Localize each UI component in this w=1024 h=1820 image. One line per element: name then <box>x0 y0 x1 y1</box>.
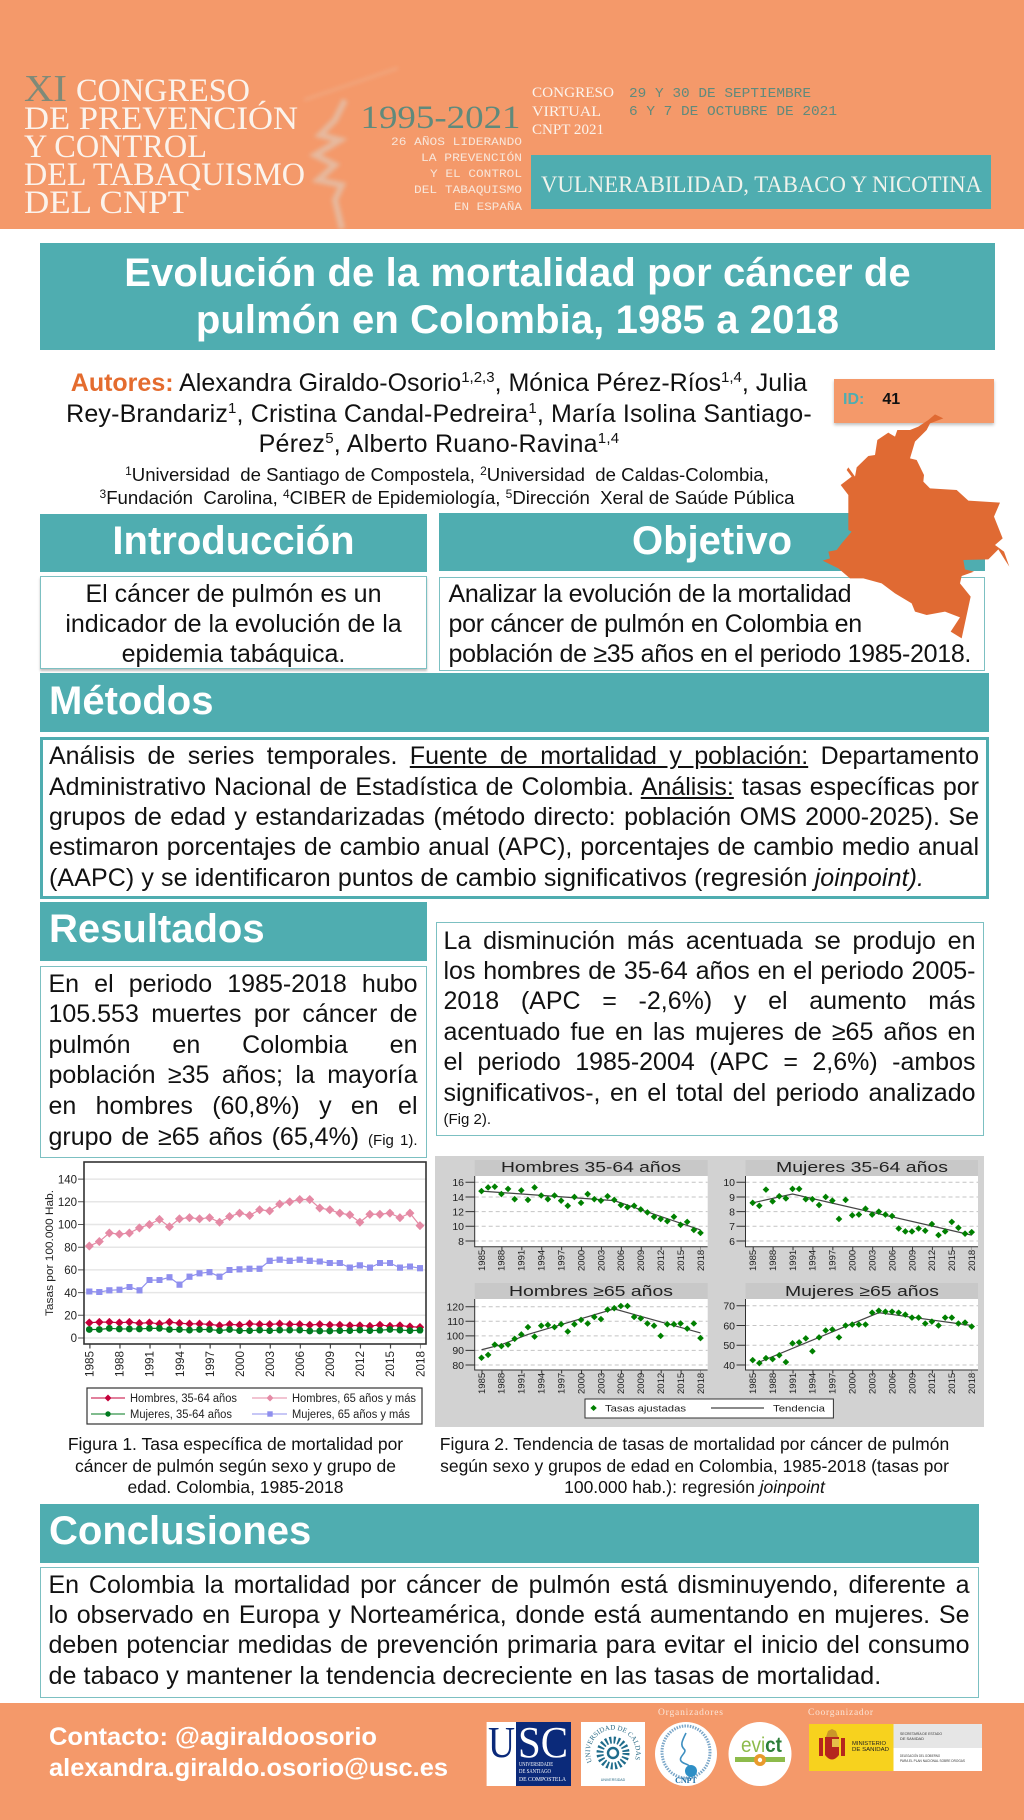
legend: Hombres, 35-64 años <box>130 1393 237 1405</box>
logo: Ministerio de Sanidad <box>809 1724 982 1771</box>
authors: Pérez5, Alberto Ruano-Ravina1,4 <box>259 430 619 458</box>
x axis: 1988 <box>114 1351 127 1377</box>
y axis and grid: 140 <box>58 1174 77 1186</box>
x axis: 2012 <box>354 1351 367 1377</box>
series: mujeres 65 y más <box>89 1260 420 1292</box>
anniversary tagline: EN ESPAÑA <box>454 201 522 214</box>
panel: mujeres 65+: 2006 <box>887 1373 898 1394</box>
x axis: 1997 <box>204 1351 217 1377</box>
panel: mujeres 65+: 2003 <box>868 1373 878 1394</box>
logo: Ministerio de Sanidad: PARA EL PLAN NACIONAL SOBRE DROGAS <box>900 1759 966 1763</box>
logo: Ministerio de Sanidad: MINISTERIO <box>852 1741 886 1747</box>
results text left: 105.553 muertes por cáncer de <box>48 1000 418 1028</box>
panel: mujeres 65+: 2015 <box>947 1373 958 1394</box>
panel: hombres 65+: 80 <box>452 1360 464 1372</box>
results text left <box>40 966 427 1158</box>
virtual congress label: CONGRESO <box>532 85 614 101</box>
objective text: población de ≥35 años en el periodo 1985-2018. <box>448 640 971 668</box>
figure 2 caption: 100.000 hab.): regresión joinpoint <box>564 1477 825 1497</box>
panel: mujeres 35-64: 1994 <box>808 1250 819 1271</box>
affiliations: 3Fundación Carolina, 4CIBER de Epidemiología, 5Dirección Xeral de Saúde Pública <box>100 487 794 508</box>
theme banner <box>531 155 991 209</box>
footer <box>0 1703 1024 1820</box>
logo: EVICT: evict <box>741 1734 782 1757</box>
panel: mujeres 65+: 70 <box>723 1300 735 1312</box>
y axis and grid: 40 <box>64 1288 77 1300</box>
conclusions text: lo observado en Europa y Norteamérica, donde está aumentando en mujeres. Se <box>48 1601 970 1629</box>
congress dates: 29 Y 30 DE SEPTIEMBRE <box>629 87 811 102</box>
panel: hombres 65+: 2018 <box>696 1373 707 1394</box>
results text left: En el periodo 1985-2018 hubo <box>48 970 418 998</box>
objective text: por cáncer de pulmón en Colombia en <box>448 610 862 638</box>
figure 2 caption: según sexo y grupos de edad en Colombia, 1985-2018 (tasas por <box>440 1456 949 1476</box>
panel: mujeres 65+: 1994 <box>808 1373 819 1394</box>
results text right: La disminución más acentuada se produjo en <box>444 927 976 955</box>
authors: Autores: Alexandra Giraldo-Osorio1,2,3, Mónica Pérez-Ríos1,4, Julia <box>71 369 807 397</box>
congress dates: 6 Y 7 DE OCTUBRE DE 2021 <box>629 105 837 120</box>
panel: mujeres 35-64: 10 <box>723 1177 735 1189</box>
panel: mujeres 65+: 50 <box>723 1340 735 1352</box>
organisers label: Organizadores <box>658 1708 723 1718</box>
methods text <box>40 737 989 899</box>
figure 2 caption <box>440 1434 949 1497</box>
congress title: DEL CNPT <box>24 185 189 221</box>
contact: Contacto: @agiraldoosorio <box>49 1723 377 1751</box>
panel: hombres 65+: 1994 <box>536 1373 547 1394</box>
legend: Mujeres, 35-64 años <box>130 1409 232 1421</box>
panel: hombres 65+: 1988 <box>497 1373 508 1394</box>
panel: hombres 35-64: 2015 <box>676 1250 687 1271</box>
conclusions heading <box>40 1504 979 1563</box>
header banner <box>0 0 1024 229</box>
affiliations <box>100 464 794 508</box>
panel: hombres 65+: 1997 <box>556 1373 567 1394</box>
panel: hombres 65+: 2012 <box>656 1373 667 1394</box>
logo: USC: U <box>488 1718 515 1767</box>
figure 1 line chart <box>44 1161 427 1425</box>
logo: Ministerio de Sanidad: DE SANIDAD <box>852 1747 889 1753</box>
panel: hombres 65+ <box>446 1283 708 1394</box>
y axis and grid: 20 <box>64 1310 77 1322</box>
panel: mujeres 35-64: 1988 <box>768 1250 779 1271</box>
logo: Ministerio de Sanidad: DELEGACIÓN DEL GOBIERNO <box>900 1753 940 1758</box>
theme banner: VULNERABILIDAD, TABACO Y NICOTINA <box>541 172 982 197</box>
panel: hombres 35-64: 2009 <box>636 1250 647 1271</box>
ID badge <box>834 379 994 423</box>
anniversary years: 1995-2021 <box>360 100 520 136</box>
x axis <box>84 1346 427 1377</box>
conclusions heading: Conclusiones <box>49 1509 311 1553</box>
results heading: Resultados <box>49 907 265 951</box>
figure 2 legend: Tendencia <box>773 1404 826 1414</box>
panel: hombres 65+: 120 <box>446 1302 464 1314</box>
contact <box>49 1723 448 1782</box>
panel: mujeres 35-64: 1997 <box>828 1250 839 1271</box>
methods text: Análisis de series temporales. Fuente de mortalidad y población: Departamento <box>49 742 979 770</box>
figure 1 caption: Figura 1. Tasa específica de mortalidad por <box>68 1434 403 1454</box>
x axis: 2006 <box>294 1351 307 1377</box>
y axis and grid: 60 <box>64 1265 77 1277</box>
congress title: Y CONTROL <box>24 129 207 165</box>
logo: Universidad de Caldas: UNIVERSIDAD DE CALDAS <box>585 1725 641 1764</box>
panel: mujeres 35-64: Mujeres 35-64 años <box>776 1160 948 1176</box>
legend: Hombres, 65 años y más <box>292 1393 416 1405</box>
panel: hombres 35-64: 2012 <box>656 1250 667 1271</box>
legend <box>87 1388 422 1424</box>
x axis: 2018 <box>414 1351 427 1377</box>
panel: hombres 35-64 <box>452 1160 708 1271</box>
co-organiser label: Coorganizador <box>808 1708 874 1718</box>
results text right: significativos-, en el total del periodo analizado <box>444 1079 976 1107</box>
anniversary tagline: DEL TABAQUISMO <box>414 185 522 197</box>
methods text: grupos de edad y estandarizadas (método directo: población OMS 2000-2025). Se <box>49 803 979 831</box>
logo: USC: SC <box>518 1718 568 1767</box>
panel: hombres 35-64: 14 <box>452 1192 464 1204</box>
panel: mujeres 35-64: 2018 <box>967 1250 978 1271</box>
virtual congress label: VIRTUAL <box>532 104 601 120</box>
figure 2 legend <box>585 1399 833 1418</box>
results text right: 2018 (APC = -2,6%) y el aumento más <box>444 987 976 1015</box>
panel: mujeres 65+ <box>723 1283 978 1394</box>
methods text: Administrativo Nacional de Estadística de Colombia. Análisis: tasas específicas por <box>49 773 979 801</box>
series: mujeres 35-64 <box>89 1328 420 1331</box>
panel: hombres 65+: 1985 <box>477 1373 488 1394</box>
panel: mujeres 35-64: 2000 <box>848 1250 858 1271</box>
y axis and grid: Tasas por 100.000 Hab. <box>44 1190 56 1316</box>
title <box>40 243 995 350</box>
y axis and grid: 80 <box>64 1242 77 1254</box>
panel: mujeres 35-64: 2015 <box>947 1250 958 1271</box>
panel: mujeres 65+: Mujeres ≥65 años <box>785 1284 939 1300</box>
logo: USC <box>487 1718 571 1786</box>
panel: hombres 35-64: 1985 <box>477 1250 488 1271</box>
logo: USC: DE COMPOSTELA <box>519 1777 567 1783</box>
panel: mujeres 35-64: 1991 <box>788 1250 799 1271</box>
x axis: 1991 <box>144 1351 157 1377</box>
panel: mujeres 35-64: 2012 <box>927 1250 938 1271</box>
panel: mujeres 35-64 <box>723 1160 978 1271</box>
conclusions text: En Colombia la mortalidad por cáncer de pulmón está disminuyendo, diferente a <box>48 1571 970 1599</box>
authors <box>66 369 812 458</box>
panel: hombres 35-64: 2018 <box>696 1250 707 1271</box>
results text left: población ≥35 años; la mayoría <box>48 1061 418 1089</box>
panel: mujeres 35-64: 2003 <box>868 1250 878 1271</box>
objective heading: Objetivo <box>632 519 792 563</box>
panel: mujeres 65+: 1997 <box>828 1373 839 1394</box>
methods heading <box>40 673 989 732</box>
panel: hombres 35-64: 1997 <box>556 1250 567 1271</box>
y axis and grid: 100 <box>58 1220 77 1232</box>
results heading <box>40 902 427 961</box>
panel: hombres 65+: 110 <box>447 1316 464 1328</box>
x axis: 2003 <box>264 1351 277 1377</box>
panel: mujeres 35-64: 1985 <box>748 1250 759 1271</box>
panel: hombres 35-64: 8 <box>458 1236 464 1248</box>
panel: hombres 35-64: 2003 <box>596 1250 607 1271</box>
results text right: (Fig 2). <box>444 1111 491 1128</box>
figure 1 caption <box>68 1434 403 1497</box>
anniversary tagline: Y EL CONTROL <box>430 169 522 181</box>
congress title: DE PREVENCIÓN <box>24 99 298 137</box>
panel: mujeres 35-64: 9 <box>729 1192 735 1204</box>
panel: mujeres 65+: 40 <box>723 1360 735 1372</box>
panel: mujeres 65+: 60 <box>723 1320 735 1332</box>
figure 2 small multiples <box>435 1156 984 1427</box>
x axis: 2000 <box>234 1350 247 1377</box>
map of Colombia <box>822 414 1010 638</box>
x axis: 1994 <box>174 1350 187 1377</box>
panel: hombres 65+: Hombres ≥65 años <box>509 1284 673 1300</box>
logo: CNPT: CNPT <box>675 1776 698 1785</box>
panel: mujeres 65+: 2018 <box>967 1373 978 1394</box>
results text right: los hombres de 35-64 años en el periodo 2005- <box>444 957 976 985</box>
x axis: 1985 <box>84 1350 97 1377</box>
panel: hombres 35-64: 10 <box>452 1221 464 1233</box>
panel: hombres 35-64: Hombres 35-64 años <box>501 1160 681 1176</box>
figure 1 caption: edad. Colombia, 1985-2018 <box>128 1477 344 1497</box>
panel: mujeres 35-64: 6 <box>729 1236 735 1248</box>
congress title <box>24 68 305 221</box>
anniversary tagline: 26 AÑOS LIDERANDO <box>391 136 522 149</box>
panel: mujeres 65+: 2012 <box>927 1373 938 1394</box>
virtual congress label <box>532 85 614 138</box>
logo: Ministerio de Sanidad: DE SANIDAD <box>900 1737 924 1741</box>
panel: mujeres 65+: 2009 <box>907 1373 918 1394</box>
logo: USC: UNIVERSIDADE <box>519 1762 553 1768</box>
virtual congress label: CNPT 2021 <box>532 122 604 138</box>
congress title: DEL TABAQUISMO <box>24 157 305 193</box>
panel: hombres 35-64: 2006 <box>616 1250 627 1271</box>
title: Evolución de la mortalidad por cáncer de <box>124 251 911 295</box>
methods text: (AAPC) y se identificaron puntos de cambio significativos (regresión joinpoint). <box>49 864 924 892</box>
results text left: pulmón en Colombia en <box>48 1031 418 1059</box>
y axis and grid: 0 <box>71 1333 77 1345</box>
logo: Ministerio de Sanidad: SECRETARÍA DE ESTADO <box>900 1732 942 1736</box>
figure 1 caption: cáncer de pulmón según sexo y grupo de <box>75 1456 396 1476</box>
panel: mujeres 35-64: 2009 <box>907 1250 918 1271</box>
panel: hombres 65+: 2003 <box>596 1373 607 1394</box>
anniversary tagline: LA PREVENCIÓN <box>421 151 522 165</box>
series: hombres 65 y más <box>89 1200 420 1246</box>
anniversary tagline <box>391 136 522 214</box>
methods heading: Métodos <box>49 679 213 723</box>
panel: mujeres 65+: 1988 <box>768 1373 779 1394</box>
objective text: Analizar la evolución de la mortalidad <box>448 580 851 608</box>
panel: mujeres 35-64: 2006 <box>887 1250 898 1271</box>
introduction heading <box>40 514 427 572</box>
panel: hombres 35-64: 2000 <box>576 1250 587 1271</box>
panel: mujeres 35-64: 8 <box>729 1206 735 1218</box>
introduction text <box>40 576 427 669</box>
logo: EVICT <box>728 1722 792 1786</box>
panel: mujeres 35-64: 7 <box>729 1221 735 1233</box>
results text left: grupo de ≥65 años (65,4%) (Fig 1). <box>48 1123 418 1151</box>
panel: hombres 65+: 100 <box>446 1331 464 1343</box>
x axis: 2015 <box>384 1350 397 1377</box>
conclusions text <box>40 1567 979 1698</box>
panel: hombres 35-64: 1988 <box>497 1250 508 1271</box>
ID badge: ID: 41 <box>843 391 900 408</box>
introduction text: epidemia tabáquica. <box>122 640 345 668</box>
contact: alexandra.giraldo.osorio@usc.es <box>49 1754 448 1782</box>
y axis and grid: 120 <box>58 1197 77 1209</box>
panel: hombres 35-64: 12 <box>452 1206 464 1218</box>
y axis and grid <box>44 1174 426 1345</box>
results text right: el periodo 1985-2004 (APC = 2,6%) -ambos <box>444 1048 976 1076</box>
title: pulmón en Colombia, 1985 a 2018 <box>196 298 839 342</box>
panel: mujeres 65+: 2000 <box>848 1373 858 1394</box>
panel: hombres 35-64: 16 <box>452 1177 464 1189</box>
logo: Universidad de Caldas: UNIVERSIDAD <box>601 1778 626 1782</box>
panel: hombres 65+: 2006 <box>616 1373 627 1394</box>
x axis: 2009 <box>324 1351 337 1377</box>
logo: Universidad de Caldas <box>581 1722 645 1786</box>
legend: Mujeres, 65 años y más <box>292 1409 410 1421</box>
objective text <box>439 577 985 671</box>
series: hombres 35-64 <box>89 1322 420 1327</box>
results text right <box>436 922 984 1136</box>
figure 2 legend: Tasas ajustadas <box>605 1404 686 1414</box>
congress title: XI <box>24 68 67 110</box>
authors: Rey-Brandariz1, Cristina Candal-Pedreira1, María Isolina Santiago- <box>66 400 812 428</box>
panel: hombres 65+: 1991 <box>517 1373 528 1394</box>
methods text: estimaron porcentajes de cambio anual (APC), porcentajes de cambio medio anual <box>49 833 979 861</box>
conclusions text: deben potenciar medidas de prevención primaria para evitar el inicio del consumo <box>48 1631 970 1659</box>
panel: mujeres 65+: 1985 <box>748 1373 759 1394</box>
panel: hombres 35-64: 1991 <box>517 1250 528 1271</box>
introduction text: indicador de la evolución de la <box>65 610 402 638</box>
panel: hombres 65+: 90 <box>452 1345 464 1357</box>
panel: hombres 65+: 2015 <box>676 1373 687 1394</box>
panel: hombres 65+: 2009 <box>636 1373 647 1394</box>
results text right: acentuado fue en las mujeres de ≥65 años en <box>444 1018 976 1046</box>
logo: USC: DE SANTIAGO <box>519 1769 552 1775</box>
congress title: CONGRESO <box>76 73 250 109</box>
affiliations: 1Universidad de Santiago de Compostela, 2Universidad de Caldas-Colombia, <box>125 464 769 485</box>
introduction heading: Introducción <box>112 519 355 563</box>
panel: hombres 35-64: 1994 <box>536 1250 547 1271</box>
figure 2 caption: Figura 2. Tendencia de tasas de mortalidad por cáncer de pulmón <box>440 1434 949 1454</box>
panel: hombres 65+: 2000 <box>576 1373 587 1394</box>
objective heading <box>439 513 985 571</box>
results text left: en hombres (60,8%) y en el <box>48 1092 418 1120</box>
conclusions text: de tabaco y mantener la tendencia decreciente en las tasas de mortalidad. <box>48 1662 881 1690</box>
introduction text: El cáncer de pulmón es un <box>85 580 382 608</box>
data series <box>89 1200 420 1331</box>
congress dates <box>629 87 837 120</box>
logo: CNPT <box>655 1722 717 1786</box>
panel: mujeres 65+: 1991 <box>788 1373 799 1394</box>
